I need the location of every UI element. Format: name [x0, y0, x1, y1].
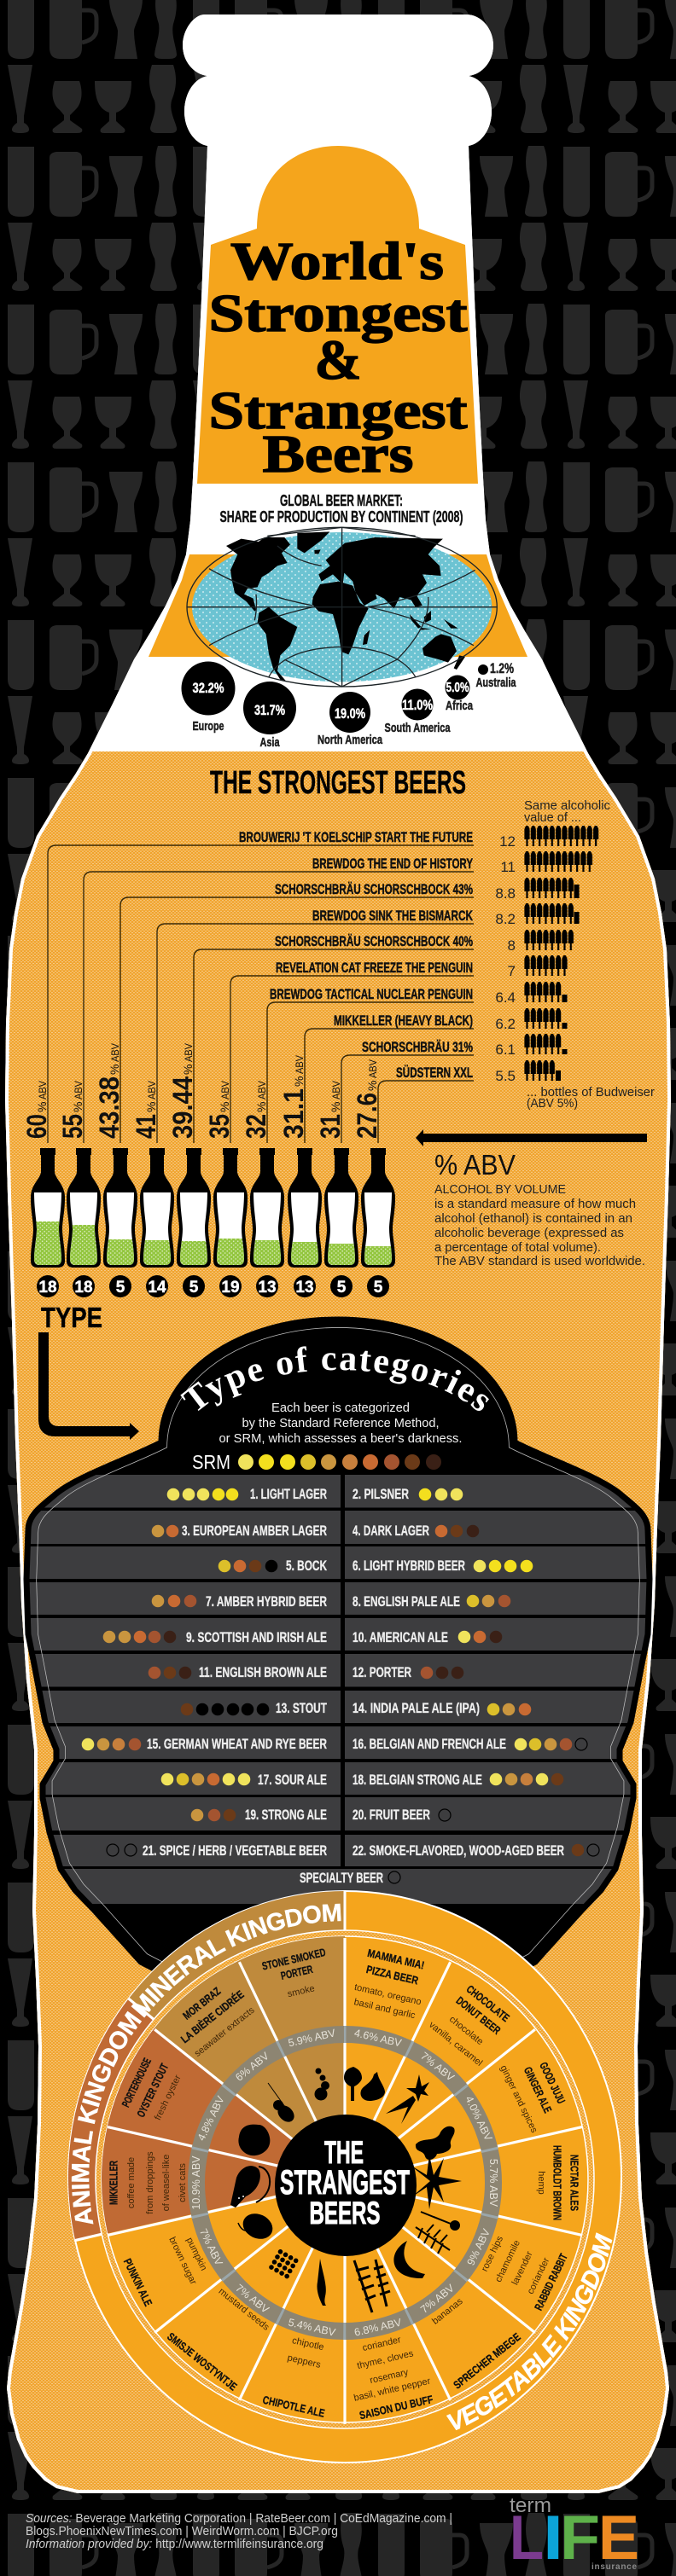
bubble: Europe: 32.2%: [193, 680, 224, 696]
Mamma Mia Pizza Beer: basil and garlic: [353, 1997, 417, 2021]
icon: ginger: [416, 2126, 455, 2160]
category 15: [82, 1737, 327, 1752]
text block: percent ABV: is a standard measure of how much: [434, 1197, 636, 1211]
type badges: 5: [116, 1279, 125, 1297]
market heading: GLOBAL BEER MARKET:: [280, 492, 403, 509]
Mamma Mia Pizza Beer: PIZZA BEER: [365, 1963, 420, 1987]
icon: herbs: [354, 2260, 390, 2312]
footer sources: Information provided by: http://www.termlifeinsurance.org: [26, 2538, 323, 2551]
Mikkeller: of weasel-like: [161, 2155, 172, 2211]
bubble: North America: 19.0%: [335, 705, 365, 722]
category 16: 16. BELGIAN AND FRENCH ALE: [353, 1737, 506, 1752]
Nectar Ales Humboldt Brown: [536, 2145, 580, 2220]
type badges: 14: [148, 1279, 166, 1297]
category 9: 9. SCOTTISH AND IRISH ALE: [186, 1630, 327, 1645]
rotated ABV labels: 32: [241, 1114, 271, 1139]
panel silhouette: [26, 1320, 650, 2064]
Saison du Buff: thyme, cloves: [356, 2348, 415, 2371]
Porterhouse Oyster Stout: OYSTER STOUT: [134, 2062, 171, 2119]
panel description: or SRM, which assesses a beer's darkness.: [219, 1431, 463, 1446]
beer names: SÜDSTERN XXL: [396, 1065, 473, 1081]
Chocolate Donut Beer: CHOCOLATE: [464, 1982, 512, 2024]
bubble: Asia: Asia: [259, 735, 280, 750]
category 18: 18. BELGIAN STRONG ALE: [353, 1772, 482, 1788]
rotated ABV labels: %: [254, 1102, 268, 1112]
neck label panel: [197, 146, 478, 484]
Rabbid Rabbit: rose hips: [480, 2234, 505, 2273]
bubble: Europe: [181, 662, 236, 734]
bubble: North America: [318, 692, 382, 747]
dotted ring: [96, 1930, 594, 2428]
logo: term life insurance: E: [598, 2503, 639, 2573]
bubble: Africa: Africa: [446, 699, 473, 713]
Mikkeller: from droppings: [145, 2151, 155, 2214]
title: Strangest: [208, 382, 468, 440]
bubble: Australia: Australia: [476, 676, 516, 690]
category 22: 22. SMOKE-FLAVORED, WOOD-AGED BEER: [353, 1843, 564, 1859]
bubble: Asia: [243, 682, 296, 750]
rotated ABV labels: %: [329, 1102, 342, 1112]
Chocolate Donut Beer: chocolate: [447, 2014, 485, 2047]
kingdom labels: MINERAL KINGDOM: [131, 1904, 341, 2018]
ABV labels: 6.8% ABV: [353, 2316, 403, 2339]
category 4: 4. DARK LAGER: [353, 1523, 429, 1539]
beer names: BROUWERIJ 'T KOELSCHIP START THE FUTURE: [239, 830, 473, 845]
ABV labels: 7% ABV: [418, 2282, 457, 2316]
Stone Smoked Porter: PORTER: [279, 1963, 314, 1982]
ABV ring: [196, 2034, 493, 2331]
rotated ABV labels: 31.1: [278, 1088, 309, 1139]
SRM scale: SRM: [192, 1451, 230, 1473]
Porterhouse Oyster Stout: PORTERHOUSE: [119, 2056, 154, 2109]
rotated ABV labels: [21, 1043, 382, 1139]
rotated ABV labels: 27.6: [352, 1093, 382, 1139]
category 13: 13. STOUT: [276, 1701, 327, 1716]
Good Juju Ginger Ale: GOOD JUJU: [537, 2060, 568, 2106]
ABV labels: [190, 2027, 499, 2339]
Smisje Wostyntje: mustard seeds: [217, 2286, 271, 2333]
category 9: [103, 1630, 327, 1645]
icon: pumpkin: [238, 2209, 277, 2243]
rotated ABV labels: 35: [204, 1114, 235, 1139]
title: Strongest: [208, 285, 468, 343]
bubble: North America: North America: [318, 733, 382, 747]
note: same alcoholic value: Same alcoholic: [524, 798, 610, 813]
arrow: percent ABV: [416, 1129, 647, 1146]
note: same alcoholic value: value of ...: [524, 810, 581, 825]
icon: hemp leaf: [410, 2155, 462, 2209]
Chipotle Ale: chipotle: [291, 2335, 325, 2353]
ABV labels: 5.4% ABV: [287, 2317, 337, 2339]
category 14: 14. INDIA PALE ALE (IPA): [353, 1701, 480, 1716]
beer names: BREWDOG SINK THE BISMARCK: [312, 908, 473, 924]
note: bottles of budweiser: ... bottles of Budweiser: [527, 1085, 655, 1099]
text block: percent ABV: alcohol (ethanol) is contained in an: [434, 1211, 632, 1226]
logo: term life insurance: term: [510, 2494, 551, 2517]
rotated ABV labels: %: [35, 1102, 49, 1112]
budweiser equivalents: 8: [508, 937, 516, 954]
budweiser equivalents: 6.1: [495, 1041, 516, 1058]
Chipotle Ale: CHIPOTLE ALE: [261, 2393, 326, 2420]
title: [208, 233, 468, 484]
chart: beer list with leader lines: [21, 826, 655, 1297]
ABV labels: 9% ABV: [465, 2226, 492, 2267]
Smisje Wostyntje: [165, 2279, 281, 2393]
category 17: 17. SOUR ALE: [258, 1772, 327, 1788]
Rabbid Rabbit: [475, 2224, 570, 2312]
rotated ABV labels: ABV: [109, 1043, 121, 1062]
category 7: [152, 1594, 327, 1610]
ABV labels: 7% ABV: [197, 2227, 225, 2268]
text block: percent ABV: a percentage of total volume).: [434, 1240, 601, 1255]
note: same alcoholic value: [524, 798, 610, 825]
Stone Smoked Porter: STONE SMOKED: [260, 1946, 327, 1973]
Good Juju Ginger Ale: GINGER ALE: [522, 2065, 555, 2115]
rotated ABV labels: 55: [57, 1114, 88, 1139]
budweiser equivalents: 7: [508, 963, 516, 979]
SRM scale: [192, 1451, 441, 1473]
footer sources: Blogs.PhoenixNewTimes.com | WeirdWorm.com | BJCP.org: [26, 2525, 338, 2538]
category 20: 20. FRUIT BEER: [353, 1807, 430, 1823]
Rabbid Rabbit: lavender: [510, 2249, 535, 2287]
panel: type of categories: [24, 1317, 652, 1971]
text block: percent ABV: [434, 1149, 645, 1268]
beer names: BREWDOG TACTICAL NUCLEAR PENGUIN: [270, 987, 473, 1002]
panel inner line: [37, 1327, 639, 2054]
rotated ABV labels: 60: [21, 1114, 52, 1139]
logo: term life insurance: L: [510, 2503, 544, 2573]
Sprecher Mbege: [412, 2282, 523, 2392]
Mamma Mia Pizza Beer: tomato, oregano: [353, 1982, 422, 2007]
rotated ABV labels: 31: [315, 1114, 346, 1139]
wheel segments: [102, 1936, 588, 2422]
kingdom labels: VEGETABLE KINGDOM: [446, 2232, 613, 2431]
Chocolate Donut Beer: [427, 1978, 517, 2068]
category 2: 2. PILSNER: [353, 1487, 409, 1502]
category 10: 10. AMERICAN ALE: [353, 1630, 448, 1645]
type badges: 18: [74, 1279, 93, 1297]
Smisje Wostyntje: SMISJE WOSTYNTJE: [165, 2329, 240, 2393]
category 8: 8. ENGLISH PALE ALE: [353, 1594, 460, 1610]
Rabbid Rabbit: coriander: [526, 2256, 552, 2296]
category 1: [167, 1487, 327, 1502]
bubble: South America: 11.0%: [402, 697, 433, 713]
Chipotle Ale: [261, 2332, 340, 2420]
logo: term life insurance: I: [543, 2503, 563, 2573]
Saison du Buff: SAISON DU BUFF: [358, 2393, 434, 2422]
note: bottles of budweiser: (ABV 5%): [527, 1096, 578, 1111]
category 7: 7. AMBER HYBRID BEER: [206, 1594, 327, 1610]
category 3: [152, 1523, 327, 1539]
bubble: Australia: [476, 660, 516, 690]
hub title: STRANGEST: [280, 2164, 410, 2202]
category 5: [219, 1558, 327, 1574]
type badges: 5: [189, 1279, 199, 1297]
rotated ABV labels: %: [71, 1102, 84, 1112]
category 17: [161, 1772, 327, 1788]
panel description: by the Standard Reference Method,: [242, 1416, 439, 1430]
icon: vanilla: [386, 2074, 429, 2124]
segment text: [108, 1946, 580, 2422]
rotated ABV labels: %: [181, 1065, 195, 1075]
ABV labels: 5.7% ABV: [487, 2159, 499, 2208]
ABV labels: 7% ABV: [233, 2282, 271, 2316]
market heading: SHARE OF PRODUCTION BY CONTINENT (2008): [220, 508, 463, 525]
logo: term life insurance: F: [560, 2503, 600, 2573]
budweiser equivalents: 5.5: [495, 1068, 516, 1084]
Porterhouse Oyster Stout: fresh oyster: [153, 2073, 184, 2122]
rotated ABV labels: 43.38: [94, 1076, 125, 1139]
chart: strangest beers wheel: [67, 1890, 622, 2463]
icon: tomato and garlic: [344, 2067, 385, 2101]
Saison du Buff: [342, 2330, 436, 2422]
rotated ABV labels: ABV: [146, 1081, 158, 1099]
wheel hub: [275, 2115, 417, 2256]
type badges: 5: [374, 1279, 383, 1297]
Rabbid Rabbit: chamomile: [493, 2238, 522, 2284]
heading: the strongest beers: THE STRONGEST BEERS: [210, 765, 466, 801]
panel description: Each beer is categorized: [271, 1401, 410, 1415]
specialty beer: SPECIALTY BEER: [300, 1871, 383, 1886]
bubble: Asia: 31.7%: [254, 702, 285, 718]
bubble: South America: South America: [384, 721, 451, 735]
ABV labels: 10.9% ABV: [190, 2155, 202, 2210]
Mor Braz: seawater extracts: [193, 2005, 257, 2059]
ABV labels: 4.8% ABV: [195, 2094, 227, 2143]
category 12: 12. PORTER: [353, 1665, 411, 1680]
leader lines: [48, 845, 474, 1143]
text block: percent ABV: % ABV: [434, 1149, 516, 1181]
icon: banana: [393, 2241, 425, 2278]
rotated ABV labels: %: [218, 1102, 231, 1112]
icon: mustard seeds: [268, 2248, 299, 2279]
bubble: Europe: Europe: [193, 719, 224, 734]
ABV labels: 7% ABV: [418, 2050, 457, 2084]
icon: civet cat: [230, 2166, 270, 2208]
category 11: 11. ENGLISH BROWN ALE: [199, 1665, 327, 1680]
Saison du Buff: coriander: [361, 2335, 402, 2353]
budweiser equivalents: 6.2: [495, 1016, 516, 1032]
Porterhouse Oyster Stout: [118, 2054, 185, 2126]
rotated ABV labels: ABV: [330, 1081, 342, 1099]
icon: chili: [317, 2259, 326, 2306]
ABV labels: 6% ABV: [233, 2050, 271, 2084]
label: type: TYPE: [41, 1302, 102, 1333]
Nectar Ales Humboldt Brown: hemp: [536, 2171, 546, 2195]
text block: percent ABV: ALCOHOL BY VOLUME: [434, 1182, 566, 1197]
category 21: [107, 1843, 327, 1859]
category 2: [353, 1487, 463, 1502]
rotated ABV labels: ABV: [73, 1081, 84, 1099]
rotated ABV labels: %: [365, 1081, 379, 1091]
type badges: 13: [258, 1279, 277, 1297]
Chipotle Ale: peppers: [286, 2353, 322, 2370]
hub title: [280, 2135, 410, 2231]
beer names: BREWDOG THE END OF HISTORY: [312, 856, 473, 872]
icon: smoke: [314, 2068, 329, 2100]
budweiser equivalents: 6.4: [495, 989, 516, 1006]
bubble: Africa: 5.0%: [446, 681, 469, 695]
hub title: THE: [324, 2135, 364, 2170]
Mikkeller: MIKKELLER: [108, 2161, 119, 2205]
type badges: 19: [221, 1279, 240, 1297]
icon: oyster: [238, 2125, 270, 2155]
rotated ABV labels: ABV: [256, 1081, 268, 1099]
Mikkeller: [108, 2151, 188, 2214]
beer names: [239, 830, 473, 1081]
Sprecher Mbege: bananas: [430, 2296, 465, 2327]
rotated ABV labels: ABV: [294, 1055, 306, 1074]
kingdom ring: [68, 1891, 621, 2463]
ABV labels: 4.0% ABV: [463, 2094, 495, 2144]
bottles with fill level: [31, 1148, 395, 1268]
market heading: [220, 492, 463, 525]
text block: percent ABV: The ABV standard is used worldwide.: [434, 1254, 645, 1268]
icon: seaweed: [268, 2083, 297, 2125]
type badges: 18: [38, 1279, 57, 1297]
hub title: BEERS: [309, 2196, 381, 2231]
rotated ABV labels: ABV: [183, 1043, 195, 1062]
Mor Braz: LA BIÈRE CIDRÉE: [178, 1987, 247, 2045]
footer sources: Sources: Beverage Marketing Corporation | RateBeer.com | CoEdMagazine.com |: [26, 2512, 452, 2526]
rotated ABV labels: ABV: [367, 1059, 379, 1078]
Punkin Ale: PUNKIN ALE: [121, 2256, 155, 2308]
panel: global beer market: [149, 492, 527, 750]
Saison du Buff: basil, white pepper: [353, 2376, 432, 2404]
row stripes: [0, 1475, 676, 1904]
category 1: 1. LIGHT LAGER: [250, 1487, 327, 1502]
Mamma Mia Pizza Beer: [350, 1946, 431, 2022]
Nectar Ales Humboldt Brown: NECTAR ALES: [568, 2155, 580, 2211]
category 19: [191, 1807, 327, 1823]
rotated ABV labels: ABV: [37, 1081, 49, 1099]
rotated ABV labels: %: [292, 1076, 306, 1087]
Punkin Ale: pumpkin: [184, 2236, 209, 2272]
Chocolate Donut Beer: vanilla, caramel: [427, 2020, 484, 2068]
beer names: SCHORSCHBRÄU SCHORSCHBOCK 43%: [275, 882, 473, 897]
panel edge: [26, 1320, 650, 2064]
kingdom labels: [72, 1904, 613, 2431]
panel description: [219, 1401, 463, 1446]
rotated ABV labels: ABV: [219, 1081, 231, 1099]
category 11: [149, 1665, 327, 1680]
type badges: [37, 1275, 389, 1297]
bubble: Australia: 1.2%: [490, 660, 514, 676]
ABV labels: 5.9% ABV: [287, 2027, 337, 2049]
note: bottles of budweiser: [527, 1085, 655, 1111]
Stone Smoked Porter: smoke: [287, 1983, 316, 1999]
category 19: 19. STRONG ALE: [245, 1807, 327, 1823]
bubble: Africa: [446, 676, 473, 713]
rotated ABV labels: 41: [131, 1114, 161, 1139]
rotated ABV labels: 39.44: [167, 1076, 198, 1139]
type badges: 5: [337, 1279, 347, 1297]
budweiser equivalents: 12: [499, 833, 516, 850]
logo: term life insurance: insurance: [592, 2562, 637, 2572]
Saison du Buff: rosemary: [369, 2367, 410, 2386]
category 21: 21. SPICE / HERB / VEGETABLE BEER: [143, 1843, 327, 1859]
beer names: SCHORSCHBRÄU SCHORSCHBOCK 40%: [275, 934, 473, 949]
category 6: 6. LIGHT HYBRID BEER: [353, 1558, 465, 1574]
Mor Braz: MOR BRAZ: [180, 1985, 223, 2022]
rotated ABV labels: %: [144, 1102, 158, 1112]
category 3: 3. EUROPEAN AMBER LAGER: [182, 1523, 327, 1539]
Mamma Mia Pizza Beer: MAMMA MIA!: [366, 1947, 426, 1972]
beer names: REVELATION CAT FREEZE THE PENGUIN: [276, 960, 473, 976]
Good Juju Ginger Ale: [498, 2047, 574, 2135]
bubble: South America: [384, 689, 451, 735]
icon: flower branch: [416, 2212, 460, 2254]
kingdom labels: ANIMAL KINGDOM: [72, 2011, 142, 2225]
title: &: [314, 329, 362, 392]
type badges: 13: [295, 1279, 314, 1297]
Rabbid Rabbit: RABBID RABBIT: [532, 2252, 570, 2312]
title: World's: [230, 233, 444, 291]
orange band behind globe: [149, 554, 527, 657]
category 13: [181, 1701, 327, 1716]
title: Beers: [263, 426, 413, 484]
budweiser equivalents: 8.2: [495, 911, 516, 927]
Nectar Ales Humboldt Brown: HUMBOLDT BROWN: [551, 2145, 563, 2220]
Mikkeller: civet cats: [178, 2163, 188, 2202]
text block: percent ABV: alcoholic beverage (expressed as: [434, 1226, 624, 1240]
category 15: 15. GERMAN WHEAT AND RYE BEER: [147, 1737, 327, 1752]
curved heading: Type of categories: [180, 1346, 489, 1411]
Mor Braz: [167, 1975, 258, 2060]
budweiser equivalents: 8.8: [495, 885, 516, 902]
logo: term life insurance: [510, 2494, 639, 2573]
category 5: 5. BOCK: [286, 1558, 327, 1574]
arrow: type to categories: [38, 1332, 139, 1440]
budweiser equivalents: 11: [500, 859, 516, 875]
rotated ABV labels: %: [108, 1065, 121, 1075]
ABV labels: 4.6% ABV: [353, 2027, 403, 2050]
Punkin Ale: brown sugar: [166, 2236, 199, 2287]
Mikkeller: coffee made: [126, 2157, 137, 2208]
footer sources: [26, 2512, 452, 2551]
Chocolate Donut Beer: DONUT BEER: [454, 1994, 504, 2037]
Sprecher Mbege: SPRECHER MBEGE: [451, 2330, 523, 2392]
mini bottle rows: [524, 826, 599, 1081]
Punkin Ale: [121, 2229, 213, 2309]
Stone Smoked Porter: [260, 1946, 334, 2004]
budweiser equivalents: [495, 833, 516, 1084]
segment dividers: [108, 1938, 582, 2424]
beer names: MIKKELLER (HEAVY BLACK): [334, 1013, 473, 1029]
beer names: SCHORSCHBRÄU 31%: [362, 1040, 473, 1055]
world map globe: [187, 527, 497, 687]
Good Juju Ginger Ale: ginger and spices: [498, 2064, 539, 2135]
